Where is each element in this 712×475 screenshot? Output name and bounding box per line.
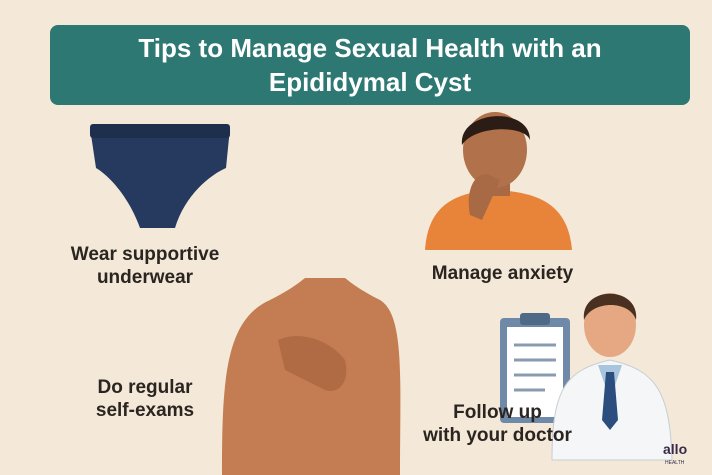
- title banner: Tips to Manage Sexual Health with an: [138, 33, 602, 63]
- text: doctor tip: Follow up: [453, 402, 542, 423]
- text: doctor tip: [423, 402, 572, 446]
- logo: [663, 441, 687, 466]
- icon: torso: [222, 278, 400, 475]
- icon: underwear: [90, 124, 230, 228]
- title banner: [50, 25, 690, 105]
- logo: HEALTH: [665, 460, 685, 466]
- logo: allo: [663, 441, 687, 457]
- text: underwear tip: Wear supportive: [71, 244, 219, 265]
- text: underwear tip: underwear: [97, 267, 193, 288]
- icon: doctor: [552, 293, 672, 460]
- text: self-exam tip: [96, 377, 194, 421]
- title banner: Epididymal Cyst: [269, 67, 471, 97]
- text: self-exam tip: Do regular: [97, 377, 193, 398]
- icon: clipboard: [500, 313, 570, 423]
- icon: thinking man: [425, 112, 572, 250]
- text: doctor tip: with your doctor: [423, 425, 572, 446]
- text: anxiety tip: Manage anxiety: [432, 263, 573, 284]
- text: self-exam tip: self-exams: [96, 400, 194, 421]
- text: underwear tip: [70, 244, 219, 288]
